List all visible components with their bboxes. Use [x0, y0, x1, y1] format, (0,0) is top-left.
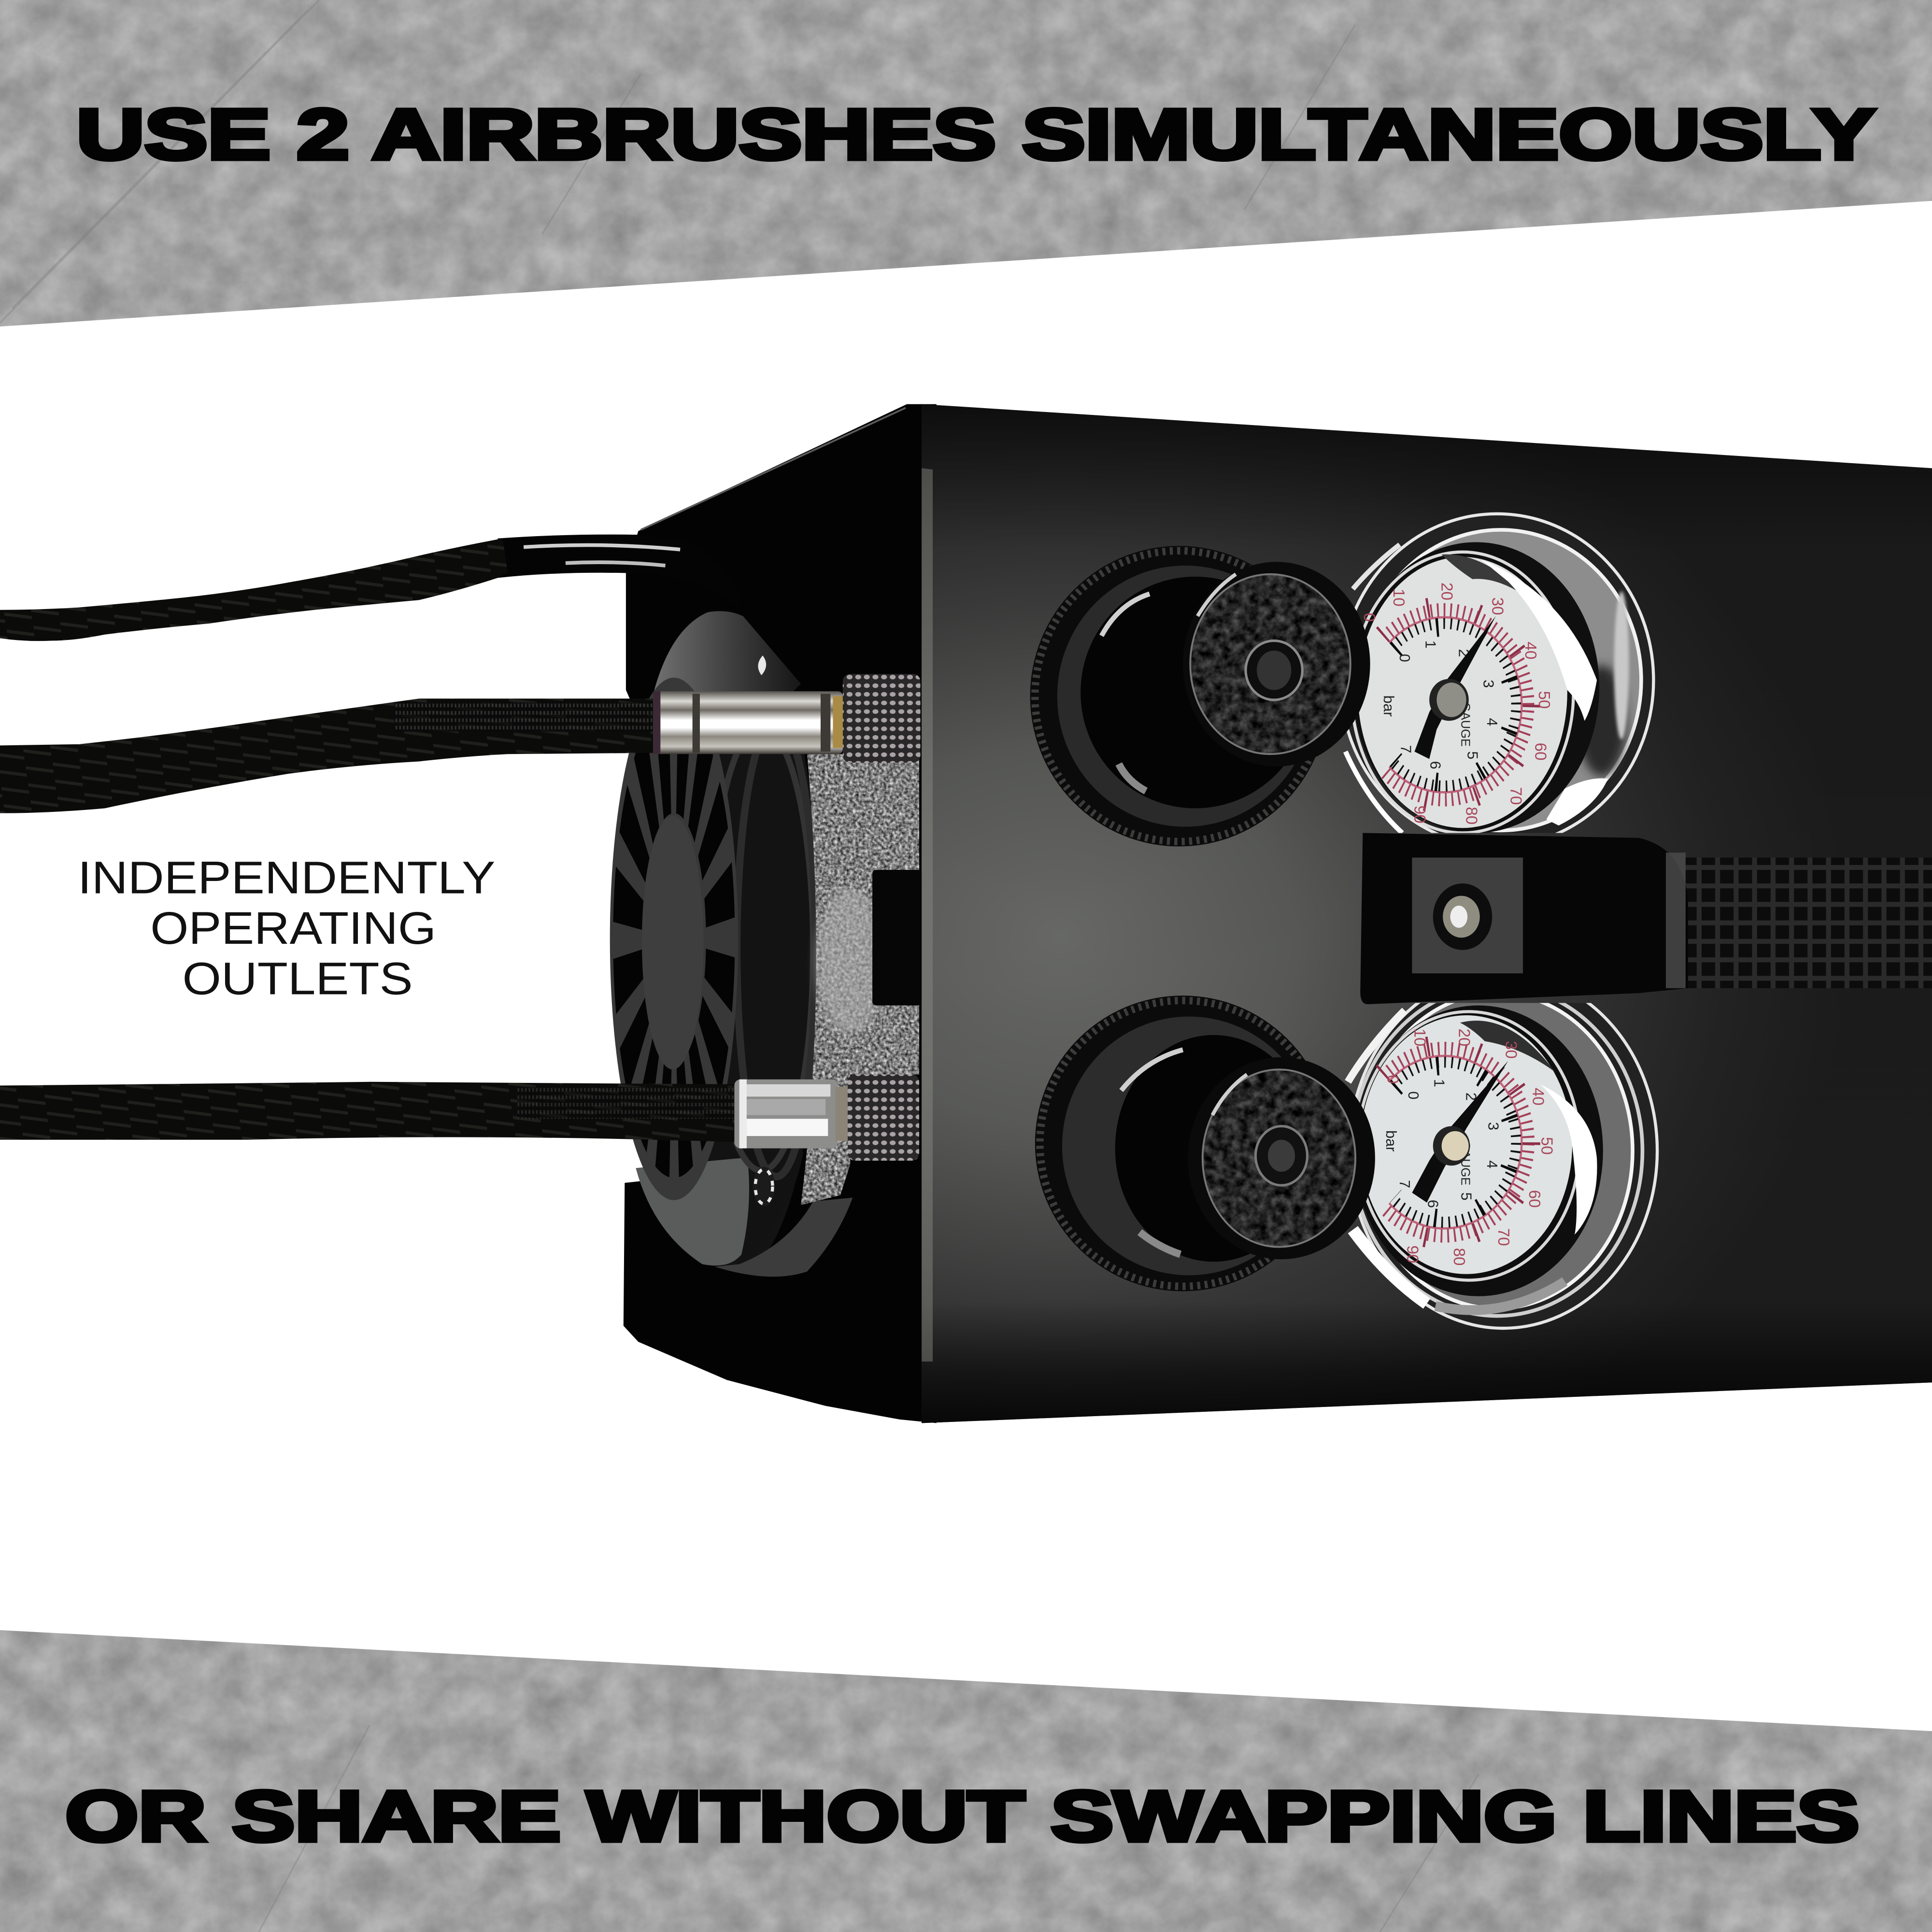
housing screw: [753, 1167, 775, 1206]
lower pressure gauge: 6: [1425, 1200, 1441, 1208]
gauge scale: [1382, 606, 1532, 803]
lower brass fitting: [734, 1074, 919, 1161]
switch window: [872, 870, 922, 1006]
gauge numbers: 50: [1535, 691, 1553, 709]
gauge face: [1360, 1015, 1572, 1274]
upper pressure gauge: GAUGE: [1459, 702, 1472, 747]
upper air tube: [498, 535, 743, 606]
gauge numbers: 20: [1438, 582, 1456, 600]
lower pressure gauge: 1: [1431, 1079, 1447, 1087]
compressor shroud, interior side: [624, 404, 937, 1423]
lower pressure gauge: GAUGE: [1459, 1141, 1472, 1185]
gauge numbers: 90: [1411, 806, 1429, 824]
lower air hose: [0, 1082, 736, 1142]
lower pressure gauge: 4: [1484, 1160, 1500, 1168]
lower regulator knob: [1035, 995, 1375, 1291]
gauge numbers: 50: [1537, 1137, 1555, 1155]
knob cap: [1188, 1057, 1375, 1259]
top concrete banner: [0, 0, 1932, 327]
gauge needle: [1415, 616, 1496, 759]
bottom heading: OR SHARE WITHOUT SWAPPING LINES: [65, 1776, 1859, 1856]
upper pressure gauge: 0: [1396, 654, 1413, 662]
gauge numbers: [1360, 582, 1553, 824]
gauge numbers: 70: [1494, 1228, 1512, 1246]
metal mounting plate: [801, 754, 919, 1205]
upper pressure gauge: 3: [1480, 680, 1496, 688]
gauge numbers: 20: [1455, 1029, 1473, 1046]
lower pressure gauge: bar: [1383, 1130, 1399, 1151]
callout: independently operating outlets: OUTLETS: [183, 954, 413, 1005]
callout: independently operating outlets: OPERATING: [150, 903, 436, 954]
title: USE 2 AIRBRUSHES SIMULTANEOUSLY: [76, 95, 1875, 174]
gauge numbers: 80: [1463, 807, 1480, 824]
upper air hose: [0, 539, 508, 641]
lower pressure gauge: 2: [1463, 1093, 1479, 1101]
upper pressure gauge: 4: [1484, 718, 1500, 726]
fan housing: [636, 611, 852, 1277]
gauge needle: [1412, 1061, 1508, 1203]
upper regulator knob: [1030, 546, 1370, 847]
gauge scale: [1382, 1045, 1532, 1239]
bottom concrete banner: [0, 1630, 1932, 1932]
gauge numbers: 0: [1383, 1075, 1401, 1084]
shroud top edge highlight: [641, 408, 906, 530]
gauge numbers: 30: [1488, 597, 1506, 615]
lower pressure gauge: 5: [1458, 1193, 1475, 1201]
gauge numbers: 90: [1403, 1245, 1421, 1263]
gauge face: [1358, 557, 1567, 828]
upper brass fitting: [653, 674, 921, 763]
gauge numbers: 60: [1532, 743, 1549, 761]
lower pressure gauge: 3: [1485, 1122, 1502, 1130]
callout: independently operating outlets: [78, 852, 496, 1005]
fan grille: [610, 678, 738, 1200]
gauge numbers: 30: [1502, 1041, 1520, 1059]
upper pressure gauge: bar: [1380, 696, 1397, 717]
lower pressure gauge: 7: [1396, 1180, 1413, 1188]
mounting bracket: [1360, 833, 1688, 1004]
knob cap: [1183, 562, 1370, 767]
air compressor illustration: [0, 404, 1932, 1423]
gauge numbers: 0: [1360, 613, 1378, 622]
upper pressure gauge: 2: [1455, 649, 1472, 657]
gauge numbers: 40: [1521, 641, 1539, 659]
gauge numbers: [1383, 1029, 1555, 1265]
middle air hose: [0, 698, 659, 813]
lower pressure gauge: 0: [1405, 1091, 1421, 1099]
chrome highlight: [1540, 1084, 1597, 1235]
gauge numbers: 10: [1390, 589, 1407, 607]
upper screw: [758, 655, 766, 675]
strap mesh: [1686, 858, 1932, 988]
gauge numbers: 70: [1507, 787, 1525, 805]
upper pressure gauge: 1: [1422, 640, 1439, 649]
upper pressure gauge: 5: [1464, 751, 1480, 759]
upper pressure gauge: 6: [1427, 761, 1444, 769]
gauge numbers: 80: [1450, 1248, 1468, 1265]
gauge numbers: 40: [1529, 1088, 1547, 1106]
compressor front face: [922, 404, 1932, 1423]
gauge numbers: 10: [1411, 1029, 1429, 1046]
lower pressure gauge: [1348, 973, 1657, 1328]
upper pressure gauge: 7: [1398, 745, 1414, 753]
gauge numbers: 60: [1525, 1190, 1543, 1208]
callout: independently operating outlets: INDEPENDENTLY: [78, 852, 496, 903]
upper pressure gauge: [1341, 514, 1653, 847]
chrome highlight: [1481, 559, 1597, 721]
